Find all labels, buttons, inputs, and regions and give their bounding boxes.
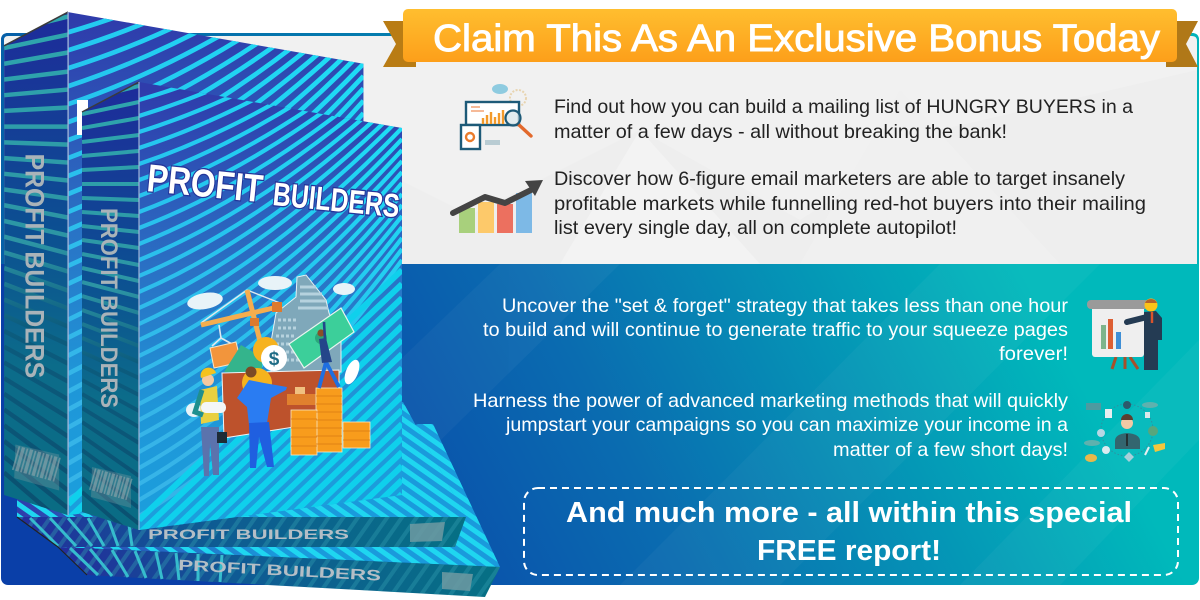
- icon: analytics dashboard: [461, 84, 531, 149]
- book: bottom: PROFIT BUILDERS: [178, 557, 381, 585]
- gold coin: [253, 337, 279, 363]
- climbing worker: [317, 322, 339, 388]
- icon: businessman with orbiting tools: [1084, 401, 1165, 462]
- title: Claim This As An Exclusive Bonus Today: [433, 18, 1160, 60]
- dollar bubble: [261, 345, 287, 371]
- book: bottom: [58, 424, 500, 597]
- banner bar: [403, 9, 1177, 62]
- wallet: [222, 370, 339, 438]
- text: set and forget: [483, 295, 1069, 365]
- book: upper: [17, 402, 466, 547]
- text: marketing methods: Harness the power of advanced marketing methods that will quickly: [473, 390, 1068, 412]
- big bill: [289, 308, 354, 368]
- text: set and forget: Uncover the "set & forget" strategy that takes less than one hour: [502, 295, 1069, 317]
- text: email marketers: [554, 168, 1146, 239]
- panel: faint diagonal bands: [400, 264, 1199, 585]
- coin stacks: [291, 388, 370, 455]
- callout: dashed free report box: And much more - all within this special: [566, 497, 1132, 529]
- box title: BUILDERS: [271, 175, 401, 224]
- crane: [201, 290, 282, 346]
- text: marketing methods: [473, 390, 1068, 461]
- text: email marketers: list every single day, all on complete autopilot!: [554, 217, 957, 239]
- illustration: front product box: [82, 0, 402, 541]
- text: email marketers: profitable markets while funnelling red-hot buyers into their mailing: [554, 193, 1146, 215]
- text: mailing list: [554, 96, 1133, 143]
- book: upper: PROFIT BUILDERS: [148, 527, 349, 542]
- illustration: wallet, crane, coins and people: [186, 275, 370, 476]
- heading ribbon: [383, 9, 1198, 67]
- worker with plans: [195, 368, 227, 476]
- hanging crate: [210, 342, 241, 368]
- clouds: [186, 276, 362, 417]
- ribbon tail right: [1166, 21, 1198, 67]
- box title: [145, 157, 401, 224]
- green bill behind wallet: [224, 345, 262, 374]
- callout: dashed free report box: FREE report!: [757, 535, 941, 567]
- illustration: back product box: [4, 0, 363, 528]
- callout: dashed free report box: [524, 488, 1178, 575]
- panel: light upper section: [4, 36, 1197, 264]
- box title: PROFIT: [145, 157, 265, 211]
- text: marketing methods: jumpstart your campaigns so you can maximize your income in a: [505, 414, 1068, 436]
- back box title fragment: [77, 100, 88, 135]
- text: set and forget: forever!: [999, 343, 1068, 365]
- man in blue: [237, 366, 287, 468]
- icon: rising bar chart: [453, 180, 543, 233]
- building: [271, 275, 341, 372]
- gold coin behind man: [242, 368, 272, 398]
- ribbon tail left: [383, 21, 416, 67]
- dollar bubble: $: [269, 349, 280, 370]
- text: email marketers: Discover how 6-figure email marketers are able to target insanely: [554, 168, 1125, 190]
- text: mailing list: Find out how you can build a mailing list of HUNGRY BUYERS in a: [554, 96, 1133, 118]
- text: mailing list: matter of a few days - all without breaking the bank!: [554, 121, 1007, 143]
- text: set and forget: to build and will continue to generate traffic to your squeeze pages: [483, 319, 1068, 341]
- illustration: stacked lower books: [17, 402, 500, 597]
- wallet clasp: [287, 387, 316, 405]
- text: marketing methods: matter of a few short days!: [833, 439, 1068, 461]
- icon: presenter with board: [1087, 298, 1162, 370]
